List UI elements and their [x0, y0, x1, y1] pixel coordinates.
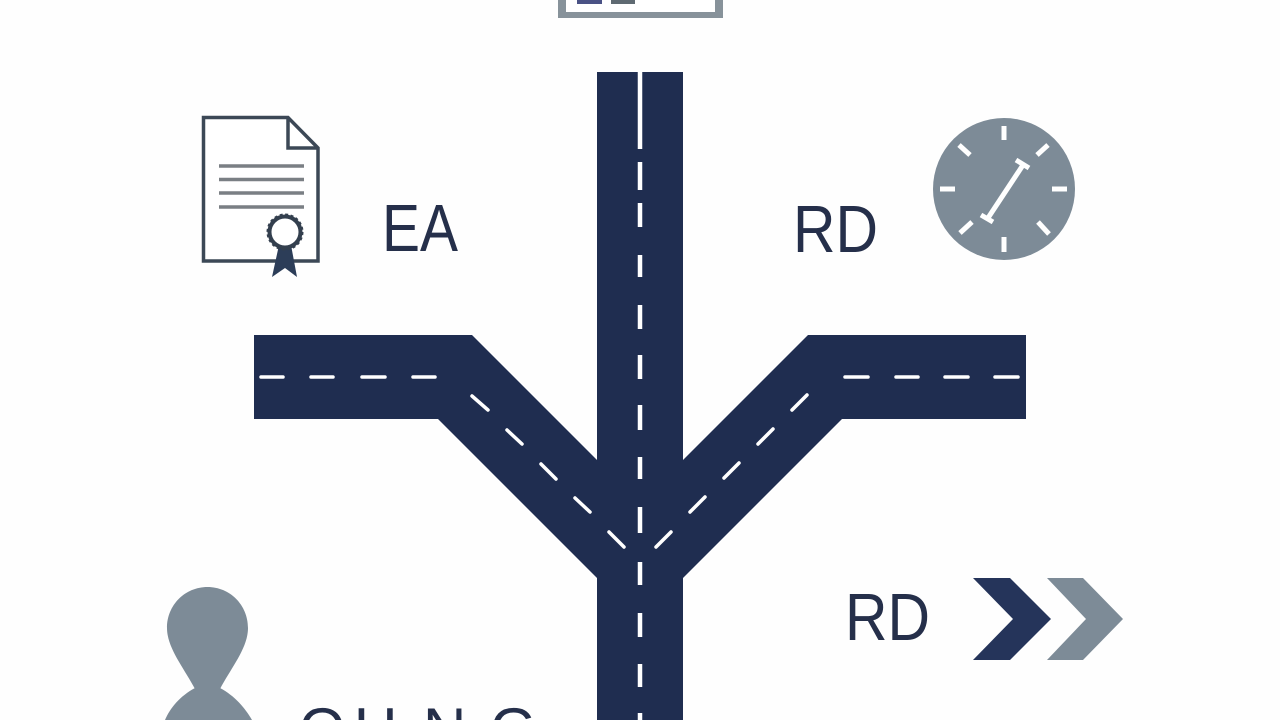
- right lane markings: [656, 377, 1018, 547]
- icon: clock: [933, 118, 1075, 260]
- icon: person: [165, 587, 252, 720]
- label: EA: EA: [382, 191, 458, 266]
- left branch road: [254, 335, 640, 620]
- vertical lane markings: [638, 72, 642, 720]
- vertical road: [597, 72, 683, 720]
- left lane markings: [261, 377, 624, 547]
- icon: certificate document: [204, 118, 318, 277]
- label: RD bottom: RD: [845, 580, 930, 655]
- label: RD top: RD: [793, 192, 878, 267]
- icon: top sign cropped: [558, 0, 723, 18]
- icon: double chevrons: [973, 578, 1123, 660]
- road network: [254, 72, 1026, 720]
- right branch road: [640, 335, 1026, 620]
